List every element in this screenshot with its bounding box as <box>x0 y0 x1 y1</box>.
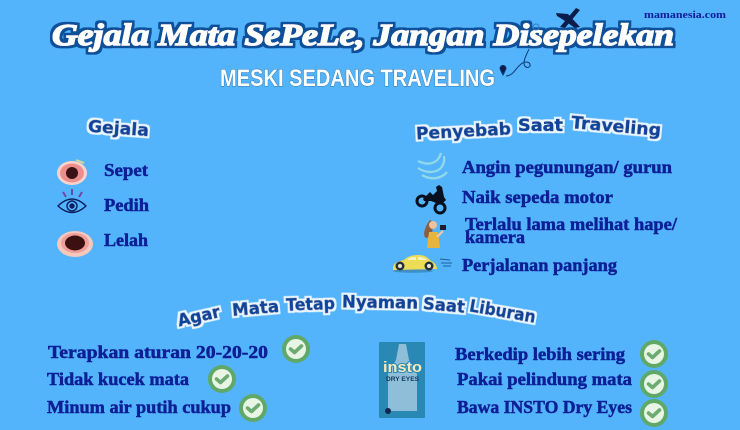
text: Perjalanan panjang: Perjalanan panjang <box>462 255 617 275</box>
icon: dashed route with map pin <box>500 24 539 76</box>
heading: Gejala: Gejala <box>87 117 150 141</box>
icon: tired eye <box>57 231 93 257</box>
heading: Agar Mata Tetap Nyaman Saat Liburan: Mata <box>231 297 280 321</box>
text: Bawa INSTO Dry Eyes: Bawa INSTO Dry Eyes <box>457 397 632 417</box>
text: Minum air putih cukup: Minum air putih cukup <box>47 397 231 417</box>
text: Terlalu lama melihat hape/ kamera: kamera <box>465 227 525 247</box>
icon: check <box>208 365 236 393</box>
panel: tips right <box>455 340 668 427</box>
heading: Agar Mata Tetap Nyaman Saat Liburan <box>176 292 537 331</box>
icon: airplane <box>556 8 580 28</box>
text: Terapkan aturan 20-20-20: Terapkan aturan 20-20-20 <box>48 342 268 362</box>
icon: yellow car <box>393 255 452 273</box>
text: Pakai pelindung mata: Pakai pelindung mata <box>457 369 632 389</box>
icon: check <box>282 335 310 363</box>
title: Gejala Mata SePeLe, Jangan Disepelekan <box>52 17 674 52</box>
icon: check <box>640 399 668 427</box>
icon: motorcycle <box>417 185 446 213</box>
icon: sore eye <box>58 189 86 212</box>
text: Angin pegunungan: Angin pegunungan/ gurun <box>462 157 672 177</box>
text: Sepet: Sepet <box>104 160 148 180</box>
heading: Agar Mata Tetap Nyaman Saat Liburan: Liburan <box>468 296 537 328</box>
icon: red eye <box>57 160 87 185</box>
text: Tidak kucek mata: Tidak kucek mata <box>47 369 189 389</box>
text: Berkedip lebih sering: Berkedip lebih sering <box>455 344 625 364</box>
heading: Agar Mata Tetap Nyaman Saat Liburan: Nyaman <box>342 292 418 314</box>
icon: woman with camera <box>424 220 446 248</box>
icon: check <box>640 370 668 398</box>
heading: Penyebab Saat Traveling: Penyebab <box>416 120 511 144</box>
heading: Penyebab Saat Traveling <box>416 113 662 144</box>
icon: wind <box>418 153 447 178</box>
text: Terlalu lama melihat hape/ kamera: Terlalu lama melihat hape/ <box>465 214 678 234</box>
panel: symptoms <box>57 160 149 257</box>
text: Terlalu lama melihat hape/ kamera <box>465 214 678 247</box>
icon: check <box>239 394 267 422</box>
website label: mamanesia.com <box>644 10 726 21</box>
panel: causes <box>393 153 678 275</box>
heading: Agar Mata Tetap Nyaman Saat Liburan: Tetap <box>286 294 335 316</box>
text: Lelah: Lelah <box>104 230 148 250</box>
heading: Penyebab Saat Traveling: Traveling <box>570 113 662 141</box>
icon: check <box>640 340 668 368</box>
text: Naik sepeda motor: Naik sepeda motor <box>462 187 613 207</box>
icon: Insto Dry Eyes box <box>379 342 425 418</box>
heading: Penyebab Saat Traveling: Saat <box>518 116 563 136</box>
icon: Insto Dry Eyes box: insto <box>383 359 422 376</box>
heading: Agar Mata Tetap Nyaman Saat Liburan: Agar <box>176 302 223 331</box>
subtitle: MESKI SEDANG TRAVELING <box>220 65 495 92</box>
text: Pedih: Pedih <box>104 195 149 215</box>
icon: Insto Dry Eyes box: DRY EYES <box>386 377 419 383</box>
panel: tips left <box>47 335 310 422</box>
heading: Agar Mata Tetap Nyaman Saat Liburan: Saat <box>422 294 466 318</box>
